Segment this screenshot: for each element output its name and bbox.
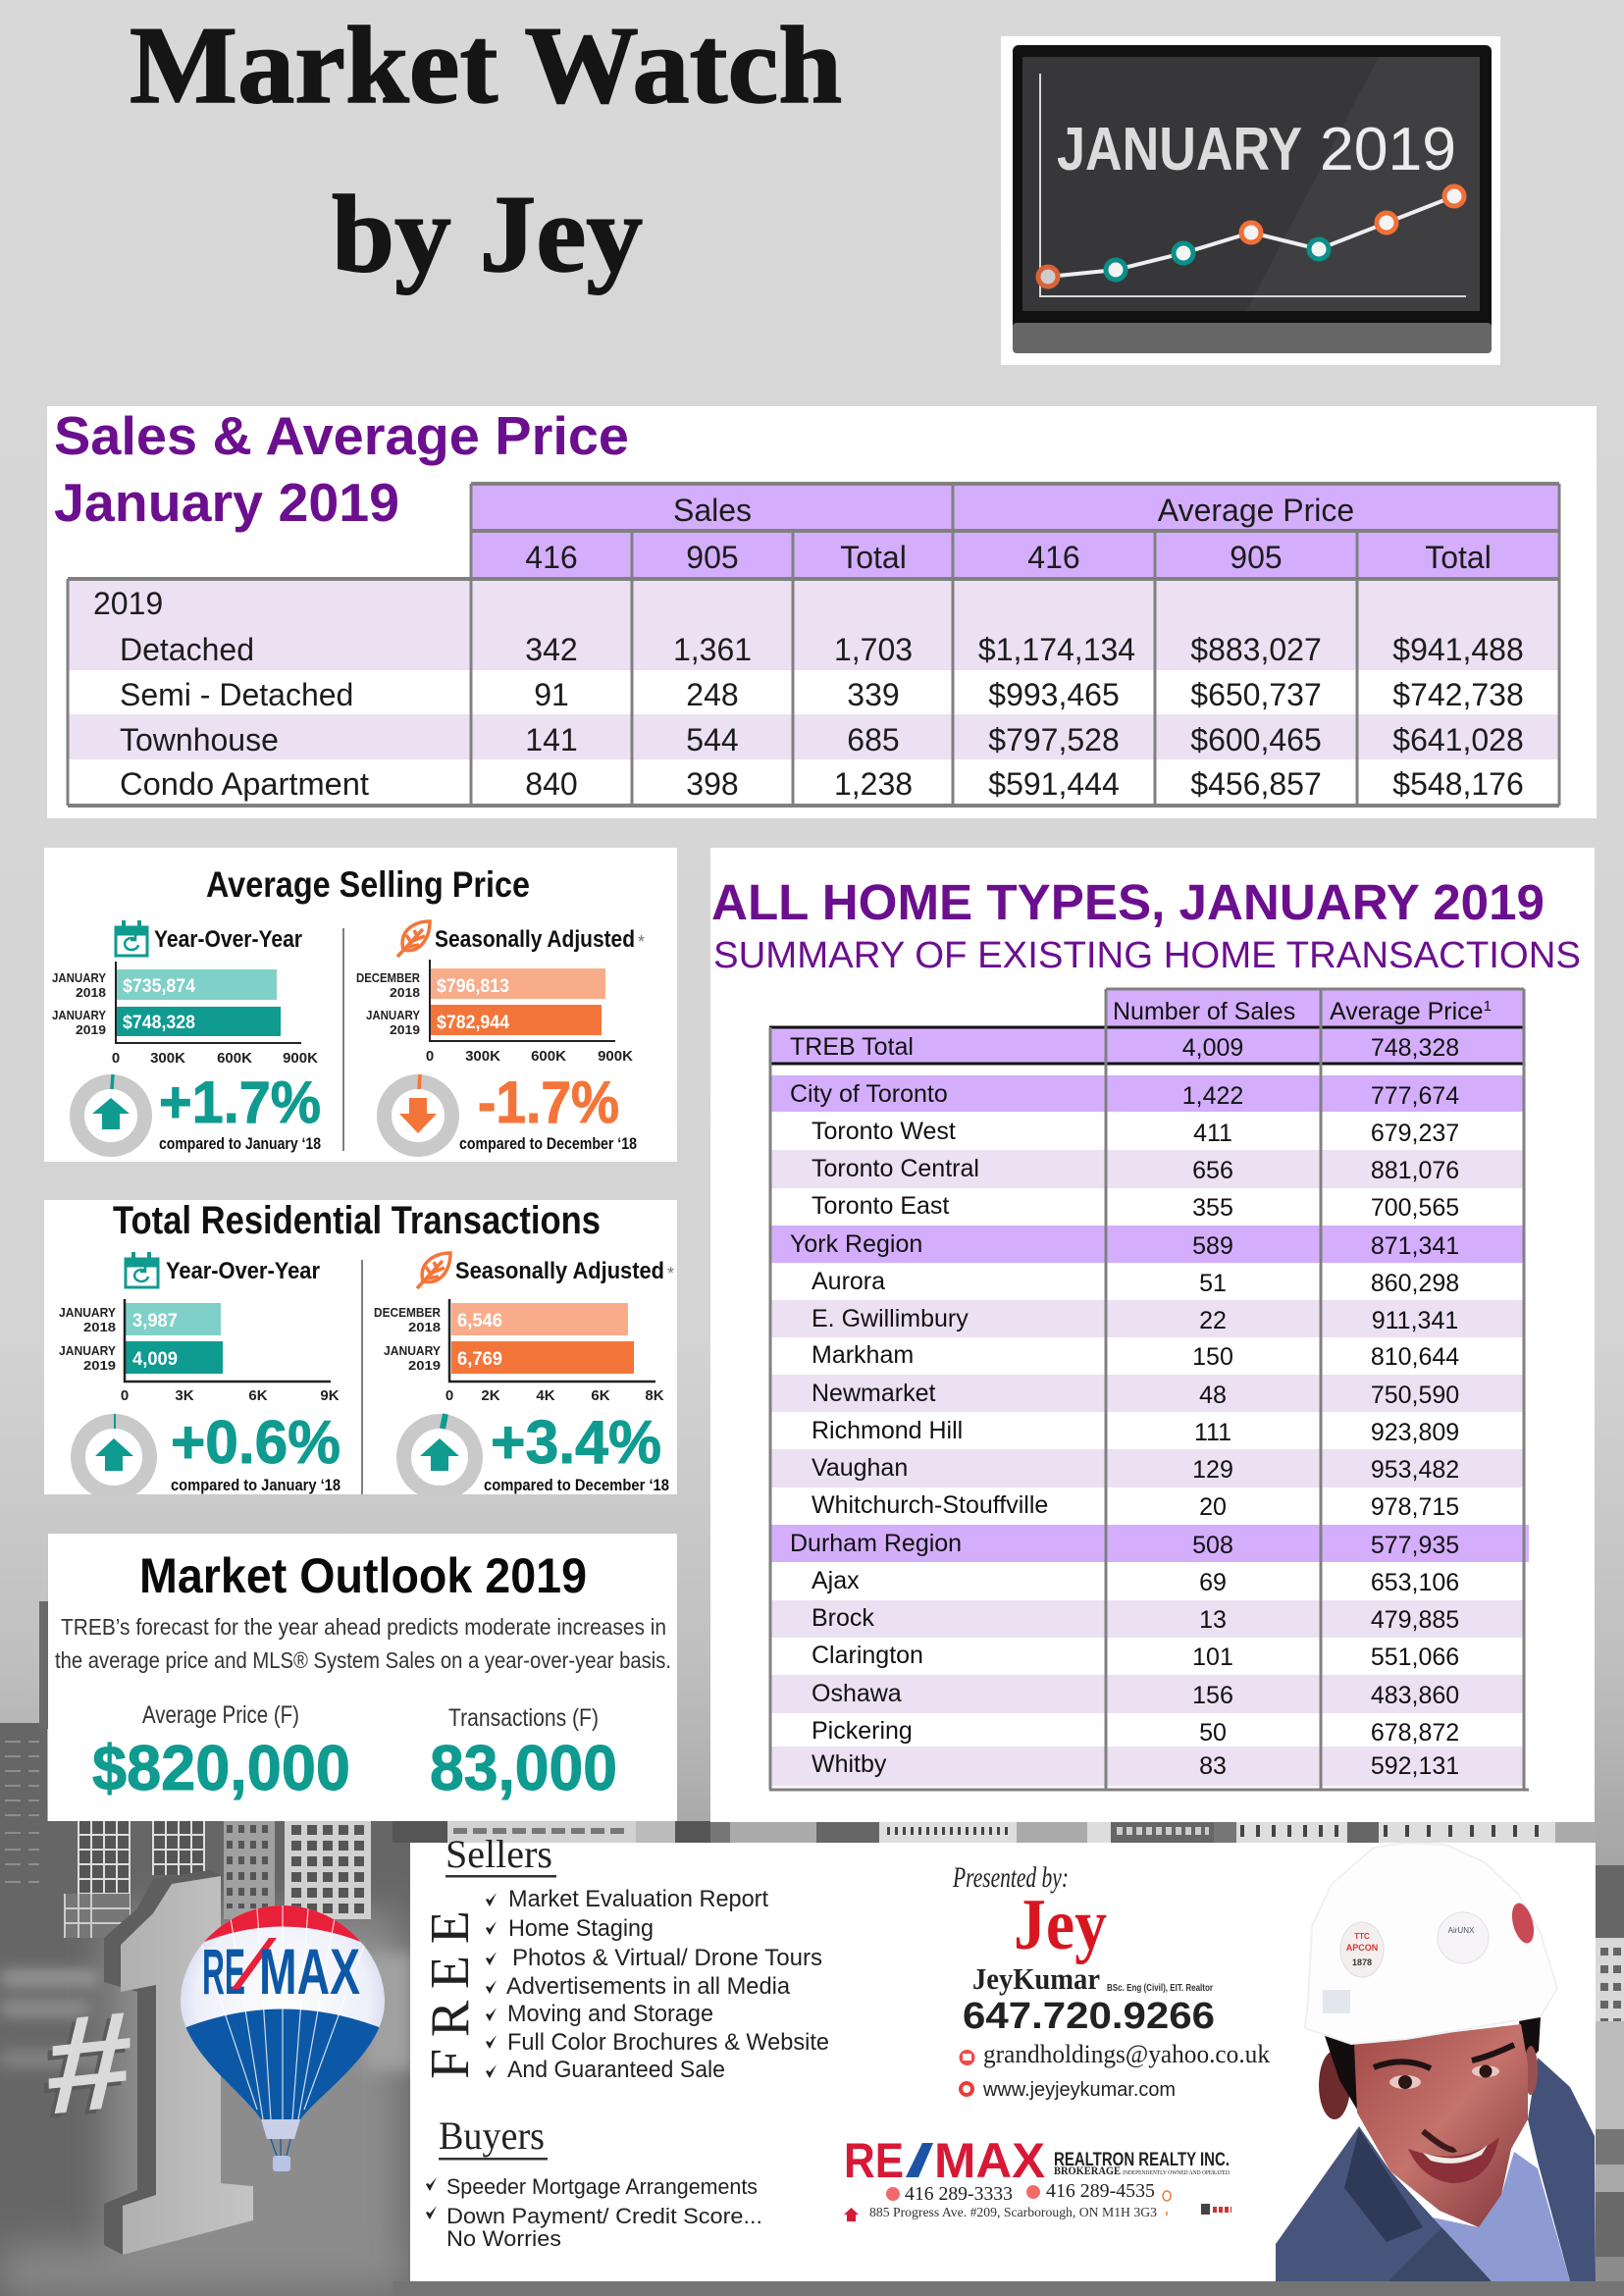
stat: average price forecast: $820,000: [92, 1732, 350, 1803]
sellers checklist: [486, 1886, 829, 2083]
bar chart: year over year price: 900K: [283, 1050, 318, 1067]
bar chart: year over year price: 0: [112, 1050, 120, 1067]
stat: plus 1.7 percent: +1.7%: [159, 1070, 321, 1135]
stat: transactions forecast: 83,000: [430, 1732, 617, 1803]
table text: 810,644: [1371, 1343, 1459, 1371]
bar chart: seasonally adjusted transactions: 8K: [645, 1387, 664, 1404]
table text: $548,176: [1392, 766, 1524, 802]
table text: Newmarket: [812, 1380, 935, 1407]
donut: plus 1.7 percent: [77, 1074, 145, 1150]
table text: 685: [847, 722, 900, 757]
bar chart: year over year transactions: 6K: [248, 1387, 268, 1404]
table text: Aurora: [812, 1268, 885, 1295]
table text: 653,106: [1371, 1569, 1459, 1596]
table text: 411: [1193, 1120, 1232, 1147]
panel: average selling price: Seasonally Adjusted: [435, 926, 635, 953]
bar chart: seasonally adjusted transactions: JANUARY: [384, 1343, 441, 1358]
bar chart: seasonally adjusted price: 300K: [465, 1048, 500, 1065]
contact: email: grandholdings@yahoo.co.uk: [983, 2040, 1270, 2068]
heading: Average Selling Price: [206, 864, 530, 905]
table text: 1,361: [673, 632, 752, 667]
sellers checklist: Home Staging: [508, 1915, 654, 1942]
laptop chart graphic: January 2019: 2019: [1320, 116, 1456, 183]
bar chart: year over year price: 300K: [150, 1050, 185, 1067]
forecast text: [55, 1614, 671, 1673]
stat: plus 3.4 percent: +3.4%: [491, 1409, 661, 1477]
bar chart: year over year transactions: 0: [121, 1387, 129, 1404]
stat: minus 1.7 percent: [459, 1070, 637, 1153]
table text: Markham: [812, 1341, 914, 1369]
panel: total residential transactions: Seasonally Adjusted: [455, 1258, 664, 1284]
hard hat: [1305, 1843, 1557, 2044]
brokerage logo: REALTRON REALTY INC.: [1054, 2150, 1230, 2170]
donut: minus 1.7 percent: [385, 1074, 451, 1150]
heading: ALL HOME TYPES, JANUARY 2019: [711, 874, 1545, 930]
table text: 48: [1199, 1382, 1227, 1409]
office phones and address: 416 289-4535: [1046, 2180, 1155, 2202]
table text: Pickering: [812, 1717, 913, 1745]
panel: services and contact: [410, 1832, 1596, 2281]
bar chart: year over year price: 2018: [76, 985, 106, 1000]
stat: average price forecast: Average Price (F): [142, 1701, 299, 1729]
table text: 2019: [93, 586, 163, 621]
photo: agent in hard hat: [1276, 1843, 1596, 2281]
table text: 551,066: [1371, 1644, 1459, 1671]
table text: 577,935: [1371, 1532, 1459, 1559]
bar chart: year over year transactions: JANUARY: [59, 1305, 116, 1320]
table text: 342: [525, 632, 578, 667]
bar chart: year over year price: JANUARY: [52, 1008, 106, 1022]
panel: total residential transactions: Year-Over-Year: [166, 1258, 320, 1284]
table text: 101: [1192, 1644, 1233, 1671]
table text: 4,009: [1182, 1034, 1243, 1062]
table text: City of Toronto: [790, 1080, 948, 1108]
table text: $456,857: [1190, 766, 1322, 802]
title: [130, 5, 842, 295]
table text: 748,328: [1371, 1034, 1459, 1062]
contact: presenter: 647.720.9266: [963, 1996, 1215, 2037]
bar chart: seasonally adjusted price: JANUARY: [366, 1008, 420, 1022]
bar chart: seasonally adjusted price: $796,813: [437, 976, 509, 997]
table text: E. Gwillimbury: [812, 1305, 969, 1332]
bar chart: year over year price: $735,874: [123, 976, 195, 997]
table text: 911,341: [1372, 1307, 1458, 1334]
table text: 656: [1192, 1157, 1233, 1184]
bar chart: seasonally adjusted transactions: 6K: [591, 1387, 610, 1404]
bar chart: seasonally adjusted price: $782,944: [437, 1013, 509, 1033]
panel: all home types table: [710, 848, 1595, 1822]
stat: minus 1.7 percent: -1.7%: [478, 1070, 619, 1135]
table text: Toronto West: [812, 1118, 956, 1145]
table text: 111: [1194, 1419, 1231, 1446]
table text: 860,298: [1371, 1270, 1459, 1297]
table text: 589: [1192, 1232, 1233, 1260]
graphic: number one 3D figure: [104, 1870, 253, 2255]
bar chart: seasonally adjusted price: DECEMBER: [356, 970, 421, 985]
table grid: [769, 989, 1529, 1790]
table text: 700,565: [1371, 1194, 1459, 1222]
sellers checklist: Photos & Virtual/ Drone Tours: [512, 1945, 822, 1971]
bar chart: seasonally adjusted price: [356, 960, 633, 1065]
contact: website: www.jeyjeykumar.com: [982, 2079, 1176, 2101]
table text: Clarington: [812, 1642, 923, 1669]
stat: plus 0.6 percent: +0.6%: [171, 1409, 341, 1477]
bar chart: seasonally adjusted transactions: DECEMBER: [374, 1305, 442, 1320]
hard hat: AirUNX: [1448, 1926, 1475, 1935]
bar chart: year over year transactions: [59, 1299, 340, 1404]
table text: 156: [1192, 1682, 1233, 1709]
table text: 1: [1484, 998, 1492, 1015]
heading: sales and average price: [54, 405, 629, 533]
brokerage logo: MAX: [934, 2133, 1045, 2188]
table text: Toronto Central: [812, 1155, 979, 1182]
table text: 840: [525, 766, 578, 802]
table grid: [68, 484, 1559, 806]
bar chart: seasonally adjusted transactions: [374, 1299, 664, 1404]
table text: Total: [840, 540, 907, 575]
table text: 905: [686, 540, 739, 575]
ear and hair: [1319, 2016, 1541, 2119]
table text: Whitchurch-Stouffville: [812, 1491, 1048, 1519]
forecast text: the average price and MLS® System Sales on a year-over-year basis.: [55, 1647, 671, 1673]
table text: Vaughan: [812, 1454, 908, 1482]
vertical label: free: FREE: [420, 1910, 481, 2079]
table text: 777,674: [1371, 1082, 1459, 1110]
buyers checklist: Down Payment/ Credit Score...: [446, 2204, 762, 2228]
table text: 750,590: [1371, 1382, 1459, 1409]
bar chart: seasonally adjusted transactions: 2K: [481, 1387, 500, 1404]
heading: sales and average price: January 2019: [54, 472, 399, 533]
table text: Sales: [673, 493, 752, 528]
graphic: RE/MAX balloon: MAX: [259, 1935, 360, 2008]
table text: 50: [1199, 1719, 1227, 1747]
contact: presenter: [952, 1861, 1215, 2037]
panel: average selling price: *: [638, 932, 645, 952]
graphic: hash sign: #: [41, 1986, 128, 2149]
table text: TREB Total: [790, 1033, 914, 1061]
bar chart: seasonally adjusted transactions: 2019: [408, 1358, 441, 1373]
icon: calendar: [116, 920, 147, 956]
title: by Jey: [332, 174, 643, 295]
stat: transactions forecast: Transactions (F): [448, 1704, 599, 1732]
table text: York Region: [790, 1230, 922, 1258]
table text: Durham Region: [790, 1530, 962, 1557]
table text: Toronto East: [812, 1192, 949, 1220]
table text: $993,465: [988, 677, 1120, 712]
table text: Number of Sales: [1113, 998, 1295, 1025]
table text: 923,809: [1371, 1419, 1459, 1446]
table text: 483,860: [1371, 1682, 1459, 1709]
table text: 881,076: [1371, 1157, 1459, 1184]
table text: 141: [525, 722, 578, 757]
buyers checklist: [426, 2174, 762, 2251]
table text: 953,482: [1371, 1456, 1459, 1484]
table text: $1,174,134: [978, 632, 1135, 667]
bar chart: year over year transactions: 2018: [83, 1320, 116, 1334]
stat: average price forecast: [92, 1701, 350, 1803]
graphic: RE/MAX balloon: [177, 1894, 389, 2171]
panel: total residential transactions: [44, 1199, 677, 1494]
office phones and address: [844, 2180, 1231, 2221]
sellers heading: Sellers: [445, 1832, 552, 1876]
shirt: [1433, 2152, 1570, 2281]
table text: 416: [525, 540, 578, 575]
table text: [790, 998, 1492, 1780]
table text: 679,237: [1371, 1120, 1459, 1147]
face: [1354, 2024, 1528, 2227]
icon: leaf: [417, 1253, 450, 1288]
bar chart: year over year transactions: 3K: [175, 1387, 194, 1404]
laptop chart graphic: January 2019: JANUARY: [1057, 116, 1302, 183]
stat: minus 1.7 percent: compared to December ‘18: [459, 1134, 637, 1153]
jacket: [1276, 2058, 1596, 2281]
heading: [711, 874, 1581, 976]
buyers checklist: No Worries: [446, 2226, 561, 2251]
sellers checklist: Advertisements in all Media: [506, 1973, 791, 2000]
bar chart: year over year transactions: 4,009: [132, 1349, 178, 1370]
table text: Richmond Hill: [812, 1417, 963, 1444]
panel: market outlook 2019: [48, 1534, 677, 1821]
table text: $797,528: [988, 722, 1120, 757]
stat: plus 3.4 percent: compared to December ‘18: [484, 1476, 669, 1494]
sellers checklist: Moving and Storage: [507, 2001, 713, 2027]
bar chart: seasonally adjusted price: 900K: [598, 1048, 633, 1065]
panel: average selling price: Year-Over-Year: [154, 926, 302, 953]
heading: SUMMARY OF EXISTING HOME TRANSACTIONS: [713, 935, 1581, 976]
table text: 22: [1199, 1307, 1227, 1334]
table text: Townhouse: [120, 722, 279, 757]
title: Market Watch: [130, 5, 842, 127]
bar chart: year over year transactions: 9K: [320, 1387, 340, 1404]
table text: 150: [1192, 1343, 1233, 1371]
bar chart: year over year transactions: 2019: [83, 1358, 116, 1373]
bar chart: seasonally adjusted price: 0: [426, 1048, 434, 1065]
table text: 339: [847, 677, 900, 712]
table text: 20: [1199, 1493, 1227, 1521]
heading: sales and average price: Sales & Average Price: [54, 405, 629, 466]
bar chart: seasonally adjusted transactions: 6,546: [457, 1311, 502, 1331]
table text: Oshawa: [812, 1680, 902, 1707]
bar chart: seasonally adjusted price: 2019: [390, 1022, 420, 1037]
bar chart: seasonally adjusted price: 600K: [531, 1048, 566, 1065]
table text: 871,341: [1371, 1232, 1459, 1260]
bar chart: year over year transactions: 3,987: [132, 1311, 178, 1331]
contact: presenter: Jey: [1014, 1885, 1107, 1965]
table text: 479,885: [1371, 1606, 1459, 1634]
icon: leaf: [397, 921, 430, 957]
table text: Brock: [812, 1604, 874, 1632]
table text: $883,027: [1190, 632, 1322, 667]
bar chart: year over year price: [52, 962, 318, 1067]
table text: Ajax: [812, 1567, 860, 1594]
table text: [93, 493, 1524, 802]
table text: 592,131: [1371, 1752, 1459, 1780]
buyers heading: Buyers: [439, 2113, 545, 2158]
table text: 905: [1230, 540, 1283, 575]
heading: Market Outlook 2019: [139, 1548, 587, 1603]
stat: plus 1.7 percent: compared to January ‘18: [159, 1134, 321, 1153]
office phones and address: 885 Progress Ave. #209, Scarborough, ON M1H 3G3: [869, 2205, 1157, 2219]
brokerage logo: BROKERAGE: [1054, 2164, 1121, 2177]
table text: 508: [1192, 1532, 1233, 1559]
panel: average selling price: [44, 848, 677, 1162]
icon: calendar: [126, 1252, 158, 1287]
bar chart: seasonally adjusted transactions: 6,769: [457, 1349, 502, 1370]
table text: Average Price: [1330, 998, 1484, 1025]
forecast text: TREB’s forecast for the year ahead predicts moderate increases in: [61, 1614, 666, 1640]
contact: presenter: BSc. Eng (Civil), EIT. Realtor: [1107, 1982, 1213, 1994]
office phones and address: 416 289-3333: [905, 2183, 1013, 2205]
table text: Total: [1425, 540, 1492, 575]
table text: 978,715: [1371, 1493, 1459, 1521]
table text: 69: [1199, 1569, 1227, 1596]
table text: 129: [1192, 1456, 1233, 1484]
bar chart: year over year transactions: JANUARY: [59, 1343, 116, 1358]
bar chart: year over year price: 600K: [217, 1050, 252, 1067]
hard hat: TTC: [1354, 1932, 1370, 1941]
stat: plus 0.6 percent: compared to January ‘18: [171, 1476, 341, 1494]
panel: total residential transactions: *: [667, 1264, 674, 1283]
table text: 398: [686, 766, 739, 802]
bar chart: seasonally adjusted transactions: 4K: [536, 1387, 555, 1404]
table text: $941,488: [1392, 632, 1524, 667]
donut: plus 0.6 percent: [79, 1414, 149, 1493]
table text: Semi - Detached: [120, 677, 353, 712]
brokerage logo: [844, 2133, 1231, 2188]
bar chart: seasonally adjusted transactions: 2018: [408, 1320, 441, 1334]
table text: 248: [686, 677, 739, 712]
table text: Detached: [120, 632, 254, 667]
table text: 51: [1199, 1270, 1227, 1297]
contact: presenter: JeyKumar: [972, 1961, 1100, 1996]
sellers checklist: Full Color Brochures & Website: [507, 2029, 829, 2056]
donut: plus 3.4 percent: [404, 1414, 475, 1493]
table text: 678,872: [1371, 1719, 1459, 1747]
graphic: RE/MAX balloon: RE: [202, 1935, 245, 2008]
table text: 13: [1199, 1606, 1227, 1634]
bar chart: seasonally adjusted price: 2018: [390, 985, 420, 1000]
brokerage logo: INDEPENDENTLY OWNED AND OPERATED: [1123, 2170, 1231, 2176]
table text: Whitby: [812, 1750, 887, 1778]
table text: 83: [1199, 1752, 1227, 1780]
bar chart: year over year price: JANUARY: [52, 970, 106, 985]
table text: 1,238: [834, 766, 913, 802]
hard hat: 1878: [1352, 1957, 1372, 1967]
table text: 544: [686, 722, 739, 757]
brokerage logo: RE: [844, 2133, 904, 2188]
table text: 355: [1192, 1194, 1233, 1222]
graphic: hash sign: #: [46, 1981, 132, 2144]
table text: $600,465: [1190, 722, 1322, 757]
hard hat: APCON: [1346, 1943, 1378, 1953]
buyers checklist: Speeder Mortgage Arrangements: [446, 2174, 758, 2199]
table text: Condo Apartment: [120, 766, 369, 802]
laptop chart graphic: January 2019: [1001, 36, 1500, 365]
table text: 1,703: [834, 632, 913, 667]
table text: $742,738: [1392, 677, 1524, 712]
table text: 91: [534, 677, 569, 712]
heading: Total Residential Transactions: [113, 1199, 601, 1242]
sellers checklist: Market Evaluation Report: [508, 1886, 768, 1912]
sellers checklist: And Guaranteed Sale: [507, 2057, 725, 2083]
table text: $650,737: [1190, 677, 1322, 712]
contact: presenter: Presented by:: [952, 1861, 1069, 1894]
bar chart: year over year price: 2019: [76, 1022, 106, 1037]
table text: $591,444: [988, 766, 1120, 802]
table text: Average Price: [1158, 493, 1354, 528]
table text: 416: [1027, 540, 1080, 575]
bar chart: seasonally adjusted transactions: 0: [445, 1387, 453, 1404]
panel: sales and average price table: [47, 405, 1597, 818]
table text: $641,028: [1392, 722, 1524, 757]
bar chart: year over year price: $748,328: [123, 1013, 195, 1033]
table text: 1,422: [1182, 1082, 1243, 1110]
